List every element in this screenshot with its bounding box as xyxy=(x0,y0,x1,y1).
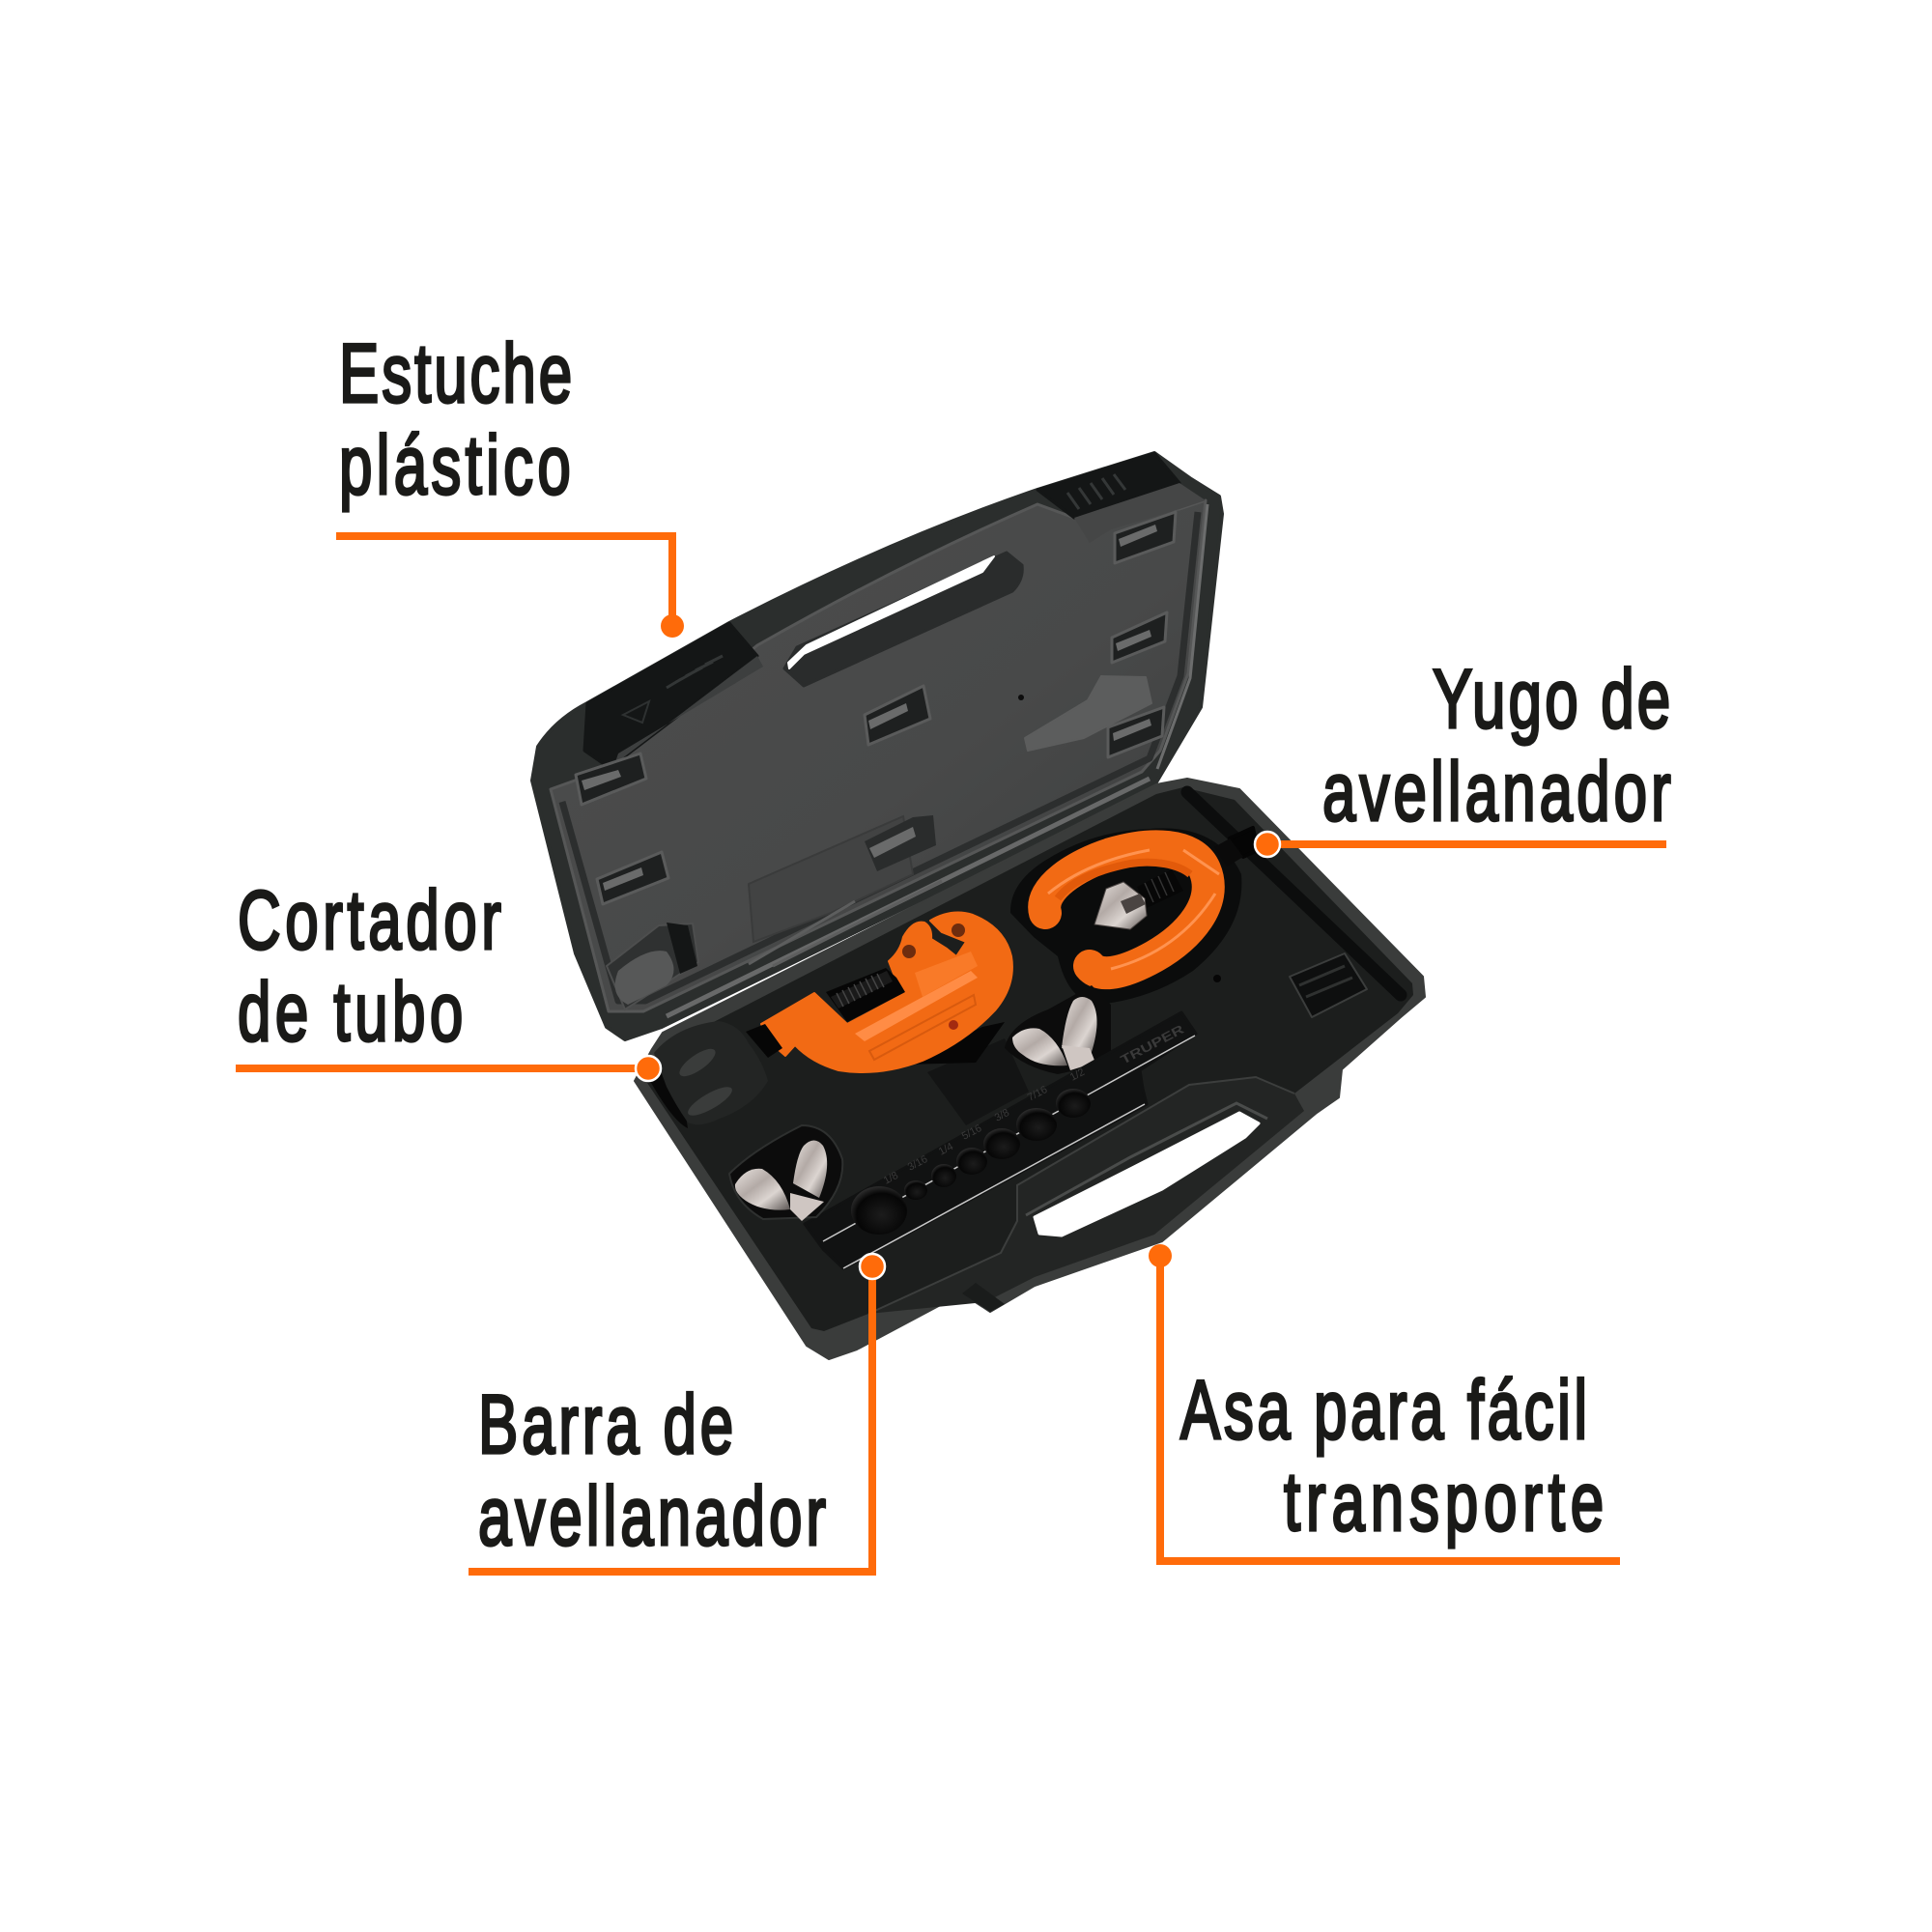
cutter highlights xyxy=(855,971,978,1041)
lid recessed slots xyxy=(576,512,1176,904)
label text xyxy=(238,873,501,1058)
yoke screw handle xyxy=(1230,828,1258,857)
cutter thread xyxy=(831,971,893,1009)
bar holes xyxy=(851,1089,1091,1235)
bar size marks: 1/4 xyxy=(937,1141,955,1158)
bar size marks: 7/16 xyxy=(1026,1084,1049,1104)
flaring yoke xyxy=(1010,828,1258,1005)
base handle inner edge xyxy=(1026,1103,1267,1215)
flaring bar xyxy=(805,1012,1196,1268)
lid rim bevel xyxy=(562,512,1198,1001)
label text: avellanador xyxy=(1322,745,1671,838)
bar body xyxy=(805,1012,1196,1268)
yoke upper thread xyxy=(1214,838,1243,867)
product: open plastic case with tools xyxy=(532,453,1425,1359)
base clasp xyxy=(962,1283,1005,1312)
label text: Asa para fácil xyxy=(1180,1363,1587,1456)
leader dot xyxy=(1149,1244,1172,1267)
lid handle opening xyxy=(784,553,1022,686)
cutter screw opening xyxy=(826,968,905,1022)
base tray xyxy=(645,787,1413,1331)
case base xyxy=(635,779,1425,1359)
lid raised rib xyxy=(1025,676,1151,751)
leader line xyxy=(1267,840,1666,848)
base outer shell xyxy=(635,779,1425,1359)
lid latch left xyxy=(584,623,763,794)
base hinge rod xyxy=(1187,792,1401,995)
cutter holes xyxy=(902,945,916,958)
callout: Yugo de avellanador xyxy=(1255,652,1671,857)
bar size marks: 3/8 xyxy=(993,1107,1011,1124)
bar seam xyxy=(823,1036,1195,1268)
base handle opening xyxy=(1035,1113,1259,1236)
tray dark cavities xyxy=(927,1038,1029,1125)
lid lower edge highlight xyxy=(667,779,1150,1016)
yoke inner face xyxy=(1058,863,1190,898)
case lid xyxy=(532,453,1222,1039)
yoke highlights xyxy=(1048,850,1219,969)
lid outer shell xyxy=(532,453,1222,1039)
bar brand text: TRUPER xyxy=(1118,1021,1187,1067)
lid lower left cavity xyxy=(607,923,698,1009)
base handle grip xyxy=(868,1077,1304,1314)
label text: Yugo de xyxy=(1433,652,1670,745)
bar size marks: 1/2 xyxy=(1068,1066,1087,1084)
leader dot xyxy=(661,614,684,638)
cutter knob thread xyxy=(746,1024,782,1058)
callout: Barra de avellanador xyxy=(469,1254,885,1572)
yoke thread xyxy=(1137,869,1183,908)
leader line xyxy=(336,536,672,618)
lid cavity slot xyxy=(865,815,936,871)
upper wing nut xyxy=(1005,985,1111,1074)
base pin dot xyxy=(1213,975,1221,982)
leader dot xyxy=(636,1056,661,1081)
lid slot highlights xyxy=(582,525,1157,891)
lid inner panel xyxy=(551,500,1206,1011)
lid cavity for bar xyxy=(749,816,913,942)
callout: Asa para fácil transporte xyxy=(1149,1244,1620,1561)
label text: avellanador xyxy=(478,1469,826,1562)
callout: Cortador de tubo xyxy=(236,873,661,1081)
yoke cone xyxy=(1094,882,1147,929)
callout: Estuche plástico xyxy=(336,327,684,638)
tube cutter xyxy=(645,913,1012,1128)
bar size marks: 5/16 xyxy=(960,1122,983,1143)
base handle edge xyxy=(868,1077,1294,1314)
bar size marks: 1/8 xyxy=(882,1170,900,1187)
label text xyxy=(339,327,572,511)
label text: Cortador xyxy=(238,873,501,966)
leader line xyxy=(469,1266,872,1572)
leader dot xyxy=(860,1254,885,1279)
label text: de tubo xyxy=(238,965,463,1058)
cutter shadow xyxy=(905,1022,1005,1065)
lid latch right xyxy=(1037,453,1206,543)
label text: Barra de xyxy=(478,1378,733,1470)
yoke orange frame xyxy=(1044,846,1208,973)
label text: transporte xyxy=(1284,1455,1604,1548)
lid pin dot xyxy=(1018,695,1024,700)
base right slot xyxy=(1290,953,1367,1017)
lid strip highlights xyxy=(749,881,942,966)
leader dot xyxy=(1255,832,1280,857)
label text: plástico xyxy=(339,418,571,511)
label text xyxy=(478,1378,826,1562)
leader line xyxy=(236,1065,648,1072)
cutter orange body xyxy=(761,913,1012,1072)
cutter knob xyxy=(645,1021,768,1128)
label text xyxy=(1322,652,1671,838)
bar size marks xyxy=(882,1066,1087,1187)
label text xyxy=(1180,1363,1604,1548)
lower wing nut xyxy=(729,1125,842,1221)
bar size marks: 3/16 xyxy=(906,1153,929,1174)
yoke recess xyxy=(1010,828,1241,1005)
label text: Estuche xyxy=(339,327,572,419)
leader line xyxy=(1160,1256,1620,1561)
